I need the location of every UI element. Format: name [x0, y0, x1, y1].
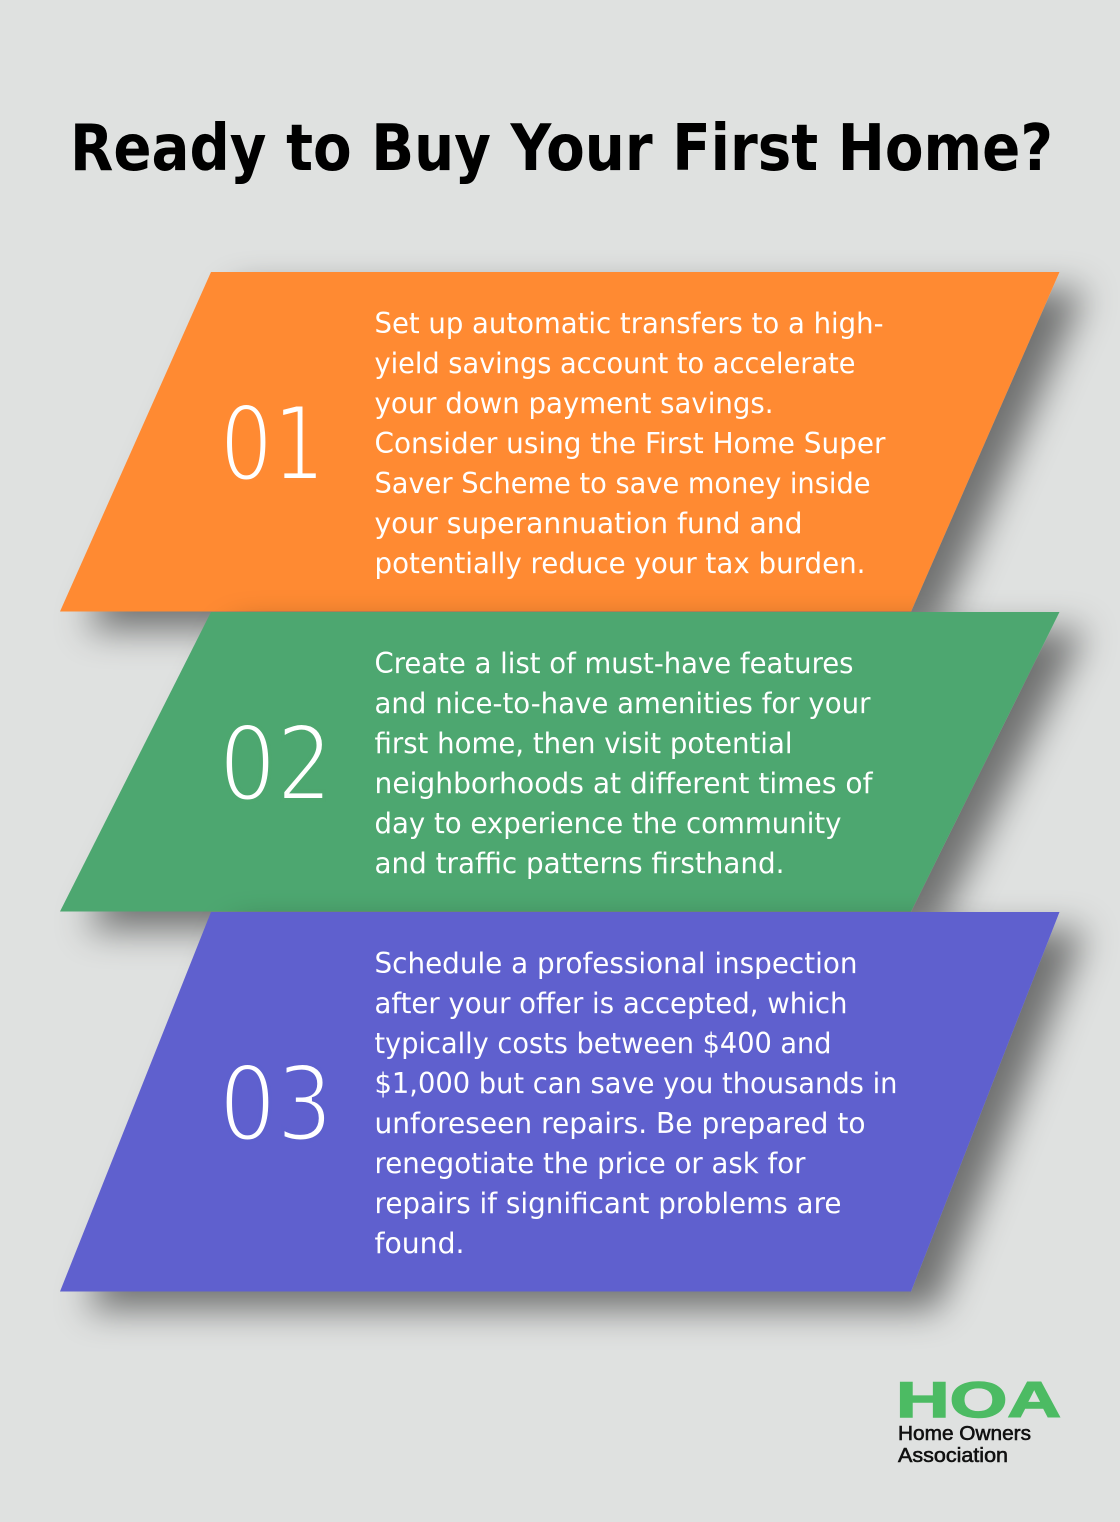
step 02 text block: Create a list of must-have features [374, 647, 854, 680]
step 02 text block [374, 647, 873, 880]
step number 03: 03 [219, 1045, 333, 1165]
step 02 text block: neighborhoods at different times of [374, 767, 873, 800]
step 01 text block: Saver Scheme to save money inside [374, 467, 870, 500]
panel: step 03 [60, 912, 1060, 1292]
step 01 text block: your down payment savings. [374, 387, 774, 420]
logo: HOA Home Owners Association: Home Owners [898, 1422, 1031, 1445]
logo: HOA Home Owners Association: Association [898, 1444, 1008, 1467]
step 01 text block [374, 307, 886, 580]
step 03 text block: repairs if significant problems are [374, 1187, 842, 1220]
step number 01: 01 [220, 385, 325, 505]
step 03 text block: found. [374, 1227, 464, 1260]
step 03 text block: Schedule a professional inspection [374, 947, 858, 980]
step 03 text block: after your offer is accepted, which [374, 987, 848, 1020]
panel: step 01 [60, 272, 1060, 612]
step 03 text block: $1,000 but can save you thousands in [374, 1067, 898, 1100]
step 02 text block: and nice-to-have amenities for your [374, 687, 871, 720]
step 01 text block: potentially reduce your tax burden. [374, 547, 866, 580]
logo: HOA Home Owners Association: HOA [896, 1372, 1061, 1428]
step 02 text block: and traffic patterns firsthand. [374, 847, 784, 880]
panel shape: green parallelogram [60, 612, 1060, 912]
step 01 text block: Consider using the First Home Super [374, 427, 886, 460]
step 02 text block: first home, then visit potential [374, 727, 792, 760]
step 02 text block: day to experience the community [374, 807, 842, 840]
logo: HOA Home Owners Association [896, 1372, 1061, 1467]
step 03 text block: renegotiate the price or ask for [374, 1147, 806, 1180]
step 03 text block: typically costs between $400 and [374, 1027, 832, 1060]
step 01 text block: Set up automatic transfers to a high- [374, 307, 884, 340]
step 01 text block: yield savings account to accelerate [374, 347, 856, 380]
step 01 text block: your superannuation fund and [374, 507, 802, 540]
panel shape: indigo parallelogram [60, 912, 1060, 1292]
step 03 text block: unforeseen repairs. Be prepared to [374, 1107, 866, 1140]
panel shape: orange parallelogram [60, 272, 1060, 612]
step 03 text block [374, 947, 898, 1260]
step number 02: 02 [219, 705, 333, 825]
panel: step 02 [60, 612, 1060, 912]
